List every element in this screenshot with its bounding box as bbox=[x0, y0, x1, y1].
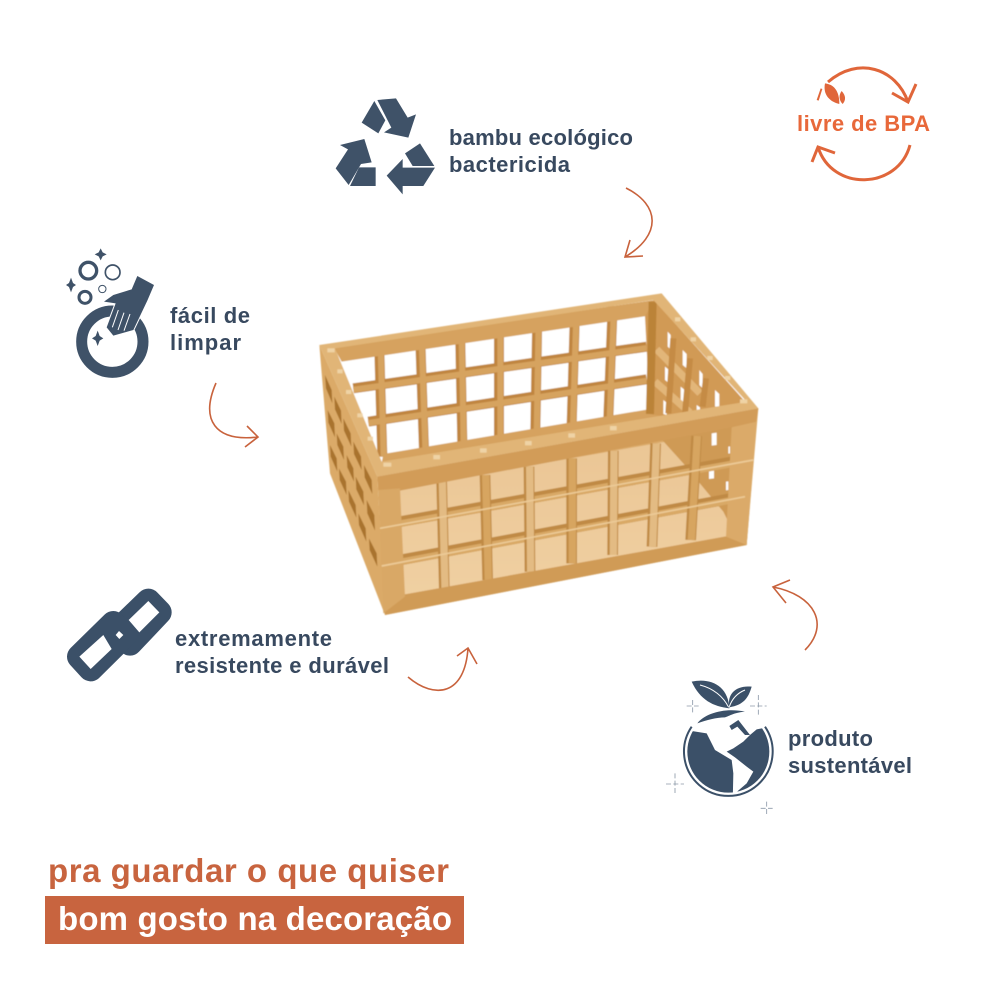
heading: pra guardar o que quiser: pra guardar o que quiser bbox=[48, 852, 449, 889]
back wall top band bbox=[333, 300, 655, 362]
arrow: sustainable to basket bbox=[773, 580, 817, 650]
rim joint marks bbox=[327, 317, 747, 467]
text: produto sustentável bbox=[788, 726, 912, 778]
back wall lower band bbox=[382, 409, 677, 463]
front left stile bbox=[378, 488, 405, 613]
back wall bars bbox=[353, 306, 647, 457]
text: bambu ecológico bactericida: bactericida bbox=[449, 152, 571, 177]
left side panel bbox=[319, 345, 385, 615]
icon: hand cleaning dish bbox=[66, 248, 154, 372]
right wall interior bbox=[645, 300, 747, 417]
text: produto sustentável: produto bbox=[788, 726, 873, 751]
front bottom band bbox=[383, 533, 747, 615]
text: fácil de limpar: fácil de bbox=[170, 303, 250, 328]
badge: livre de BPA bbox=[797, 68, 930, 180]
arrow: recycling to basket bbox=[625, 188, 652, 257]
icon: globe with leaves bbox=[666, 681, 773, 815]
text: fácil de limpar bbox=[170, 303, 250, 355]
front panel bbox=[377, 408, 758, 615]
text: extremamente resistente e durável: resistente e durável bbox=[175, 653, 389, 678]
icon: chain link bbox=[79, 601, 159, 669]
basket interior opening bbox=[335, 300, 747, 462]
text: extremamente resistente e durável: extremamente bbox=[175, 626, 332, 651]
front right stile bbox=[726, 422, 757, 545]
view through front windows: right wall bbox=[662, 427, 732, 525]
top rim bbox=[319, 293, 758, 477]
icon: leaves bbox=[817, 83, 845, 104]
badge: livre de BPA: livre de BPA bbox=[797, 111, 930, 136]
front top band bbox=[377, 408, 758, 493]
text: bambu ecológico bactericida: bambu ecológico bbox=[449, 125, 633, 150]
banner: bom gosto na decoração: bom gosto na decoração bbox=[58, 900, 452, 937]
bamboo basket product photo bbox=[319, 293, 758, 615]
icon: recycling arrows bbox=[336, 98, 435, 194]
text: produto sustentável: sustentável bbox=[788, 753, 912, 778]
front bars bbox=[400, 436, 733, 588]
arrow: link to basket bbox=[408, 648, 477, 690]
arrow: cleaning to basket bbox=[210, 383, 258, 447]
text: bambu ecológico bactericida bbox=[449, 125, 633, 177]
text: extremamente resistente e durável bbox=[175, 626, 389, 678]
circular arrows bbox=[812, 68, 916, 180]
text: fácil de limpar: limpar bbox=[170, 330, 241, 355]
